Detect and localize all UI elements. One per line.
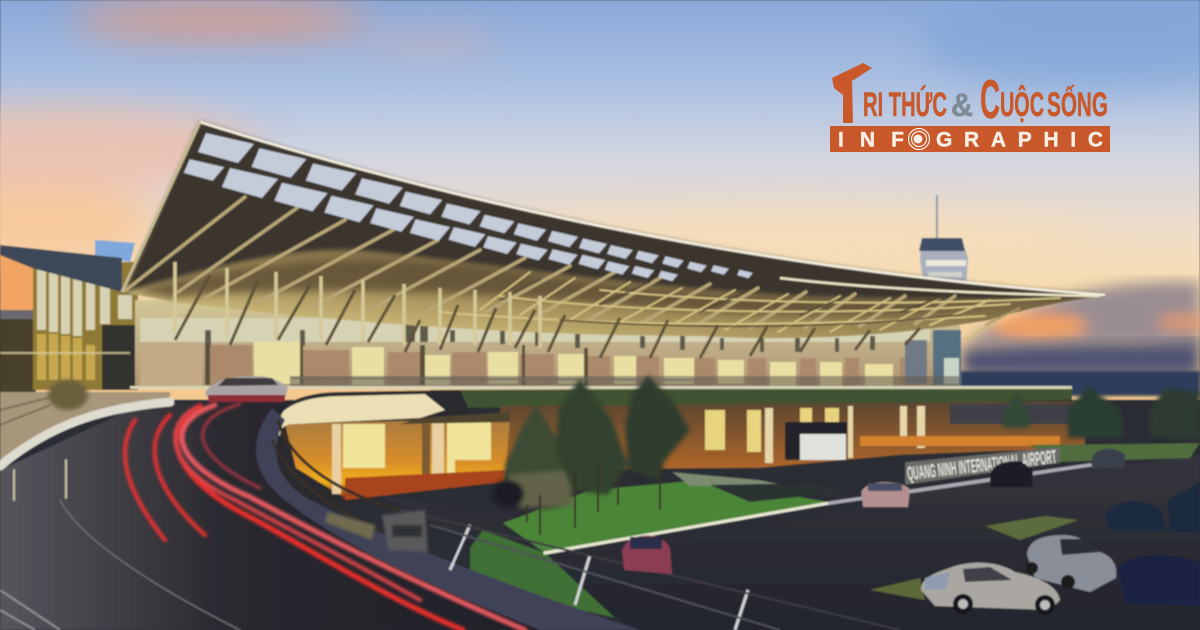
- logo wordmark: UỘC: [1000, 85, 1044, 124]
- road kerbs: [0, 402, 1090, 630]
- logo icon: concentric circle: [908, 128, 930, 150]
- clerestory windows: [140, 318, 930, 352]
- left glass building: [0, 240, 138, 392]
- car on drop-off road: [205, 376, 288, 402]
- distant horizon: [960, 371, 1200, 396]
- terminal facade: [135, 300, 961, 388]
- parking lot: [380, 455, 1200, 630]
- roof edge highlight: [122, 122, 1105, 296]
- car: navy sedan: [1118, 555, 1200, 606]
- control tower: [919, 195, 968, 290]
- ground left of terminal: [0, 392, 170, 465]
- overpass outer wall: [256, 408, 640, 630]
- roof dark underside band: [124, 122, 1105, 299]
- logo banner text: [838, 128, 1103, 152]
- car: grey SUV: [1026, 535, 1116, 592]
- ground base: [0, 400, 640, 630]
- roof skylight panels: [184, 133, 753, 281]
- parked cars: [622, 449, 1200, 615]
- roof underside: [122, 122, 1105, 338]
- sky background: [0, 0, 1200, 400]
- car: far dark: [1092, 449, 1125, 469]
- roof ribs: [126, 197, 1060, 332]
- logo: [830, 63, 1110, 152]
- roof mid brown band: [135, 260, 1020, 315]
- logo banner text: INF: [838, 128, 904, 152]
- car: silver sedan: [921, 563, 1060, 615]
- curved overpass glowing lower hall: [255, 390, 510, 505]
- roof support columns: [175, 262, 1020, 358]
- car: red silver: [861, 482, 910, 507]
- logo banner: [830, 126, 1110, 152]
- car: black by sign: [990, 461, 1033, 487]
- logo wordmark: SỐNG: [1047, 85, 1108, 124]
- logo wordmark: [863, 68, 1108, 130]
- parking bay under overpass: [325, 510, 428, 552]
- railings: [0, 378, 900, 630]
- logo icon: T: [832, 63, 872, 123]
- lawn: [470, 443, 1200, 618]
- car: dark red: [622, 535, 672, 574]
- upper deck with greenery: [130, 376, 1072, 408]
- trees: [48, 375, 1200, 510]
- logo wordmark: C: [980, 68, 1000, 130]
- red light trails: [125, 404, 525, 630]
- logo banner text: GRAPHIC: [936, 128, 1103, 152]
- sunset clouds: [962, 282, 1200, 376]
- bus: [785, 422, 847, 460]
- car: dark blue rows: [1105, 482, 1200, 532]
- logo wordmark: &: [951, 87, 973, 123]
- logo wordmark: RI THỨC: [863, 86, 947, 124]
- tree trunks: [527, 465, 660, 535]
- lower level right: [500, 401, 1085, 470]
- terminal sign: [905, 447, 1060, 485]
